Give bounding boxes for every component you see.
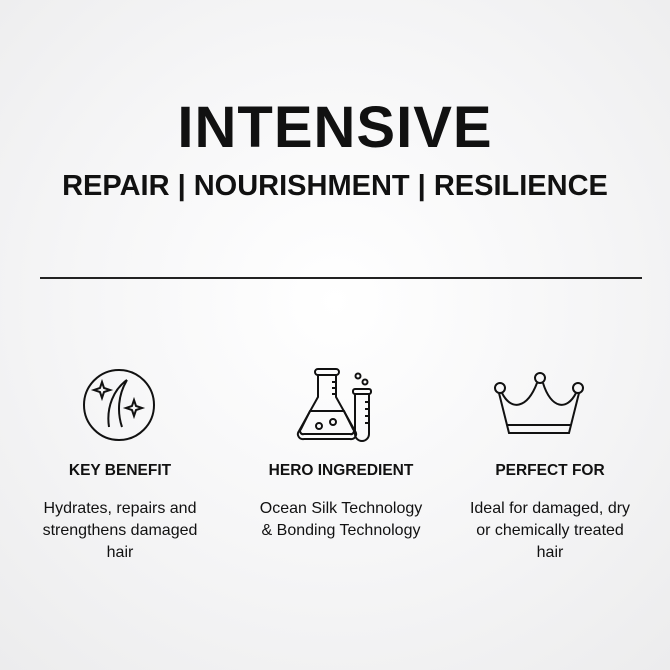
text: perfect for: or chemically treated xyxy=(476,522,624,539)
heading: hero ingredient: HERO INGREDIENT xyxy=(269,462,413,479)
text: hero ingredient: & Bonding Technology xyxy=(262,522,420,539)
text: key benefit: strengthens damaged xyxy=(43,522,197,539)
panel: hero ingredient xyxy=(260,462,422,539)
panel: perfect for xyxy=(470,462,630,561)
text: perfect for: hair xyxy=(537,544,563,561)
subtitle: REPAIR | NOURISHMENT | RESILIENCE xyxy=(62,170,608,202)
title: INTENSIVE xyxy=(177,95,493,160)
text: perfect for: Ideal for damaged, dry xyxy=(470,500,630,517)
panel: key benefit xyxy=(43,462,197,561)
text: key benefit: Hydrates, repairs and xyxy=(44,500,196,517)
icon: crown xyxy=(494,372,584,434)
icon: flask xyxy=(296,368,372,442)
text: key benefit: hair xyxy=(107,544,133,561)
heading: perfect for: PERFECT FOR xyxy=(495,462,605,479)
heading: key benefit: KEY BENEFIT xyxy=(69,462,171,479)
icon: hair sparkle xyxy=(83,369,155,441)
text: key benefit xyxy=(43,500,197,561)
text: perfect for xyxy=(470,500,630,561)
text: hero ingredient: Ocean Silk Technology xyxy=(260,500,422,517)
text: hero ingredient xyxy=(260,500,422,539)
